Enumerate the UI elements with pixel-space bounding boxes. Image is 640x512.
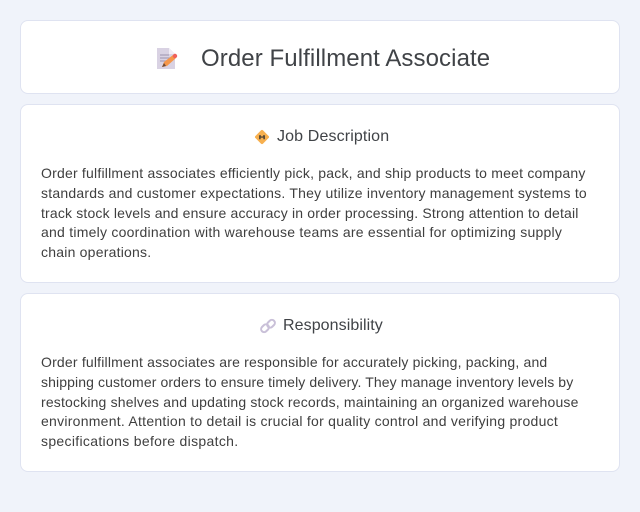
text: responsibility body: environment. Attention to detail is crucial for quality control and verifying product [41, 413, 558, 429]
text: job description body: standards and customer expectations. They utilize inventory management systems to [41, 185, 587, 201]
text: responsibility body: restocking shelves and updating stock records, maintaining an organized warehouse [41, 394, 579, 410]
text: job description body: track stock levels and ensure accuracy in order processing. Strong attention to detail [41, 205, 579, 221]
text: job description body [41, 165, 587, 260]
icon: document with pencil [157, 48, 178, 69]
heading: job description: Job Description [277, 128, 389, 145]
text: job description body: chain operations. [41, 244, 151, 260]
icon: diamond sign [254, 130, 270, 144]
text: responsibility body: shipping customer orders to ensure timely delivery. They manage inventory levels by [41, 374, 573, 390]
panel: title card [20, 20, 620, 94]
text: job description body: Order fulfillment associates efficiently pick, pack, and ship products to meet company [41, 165, 586, 181]
panel: responsibility [20, 293, 620, 472]
icon: chain link [260, 318, 276, 334]
panel: job description [20, 104, 620, 283]
heading: responsibility: Responsibility [283, 317, 383, 334]
heading: page title: Order Fulfillment Associate [201, 45, 490, 72]
text: responsibility body: specifications before dispatch. [41, 433, 238, 449]
text: responsibility body: Order fulfillment associates are responsible for accurately picking, packing, and [41, 354, 547, 370]
text: job description body: and timely coordination with warehouse teams are essential for optimizing supply [41, 224, 562, 240]
